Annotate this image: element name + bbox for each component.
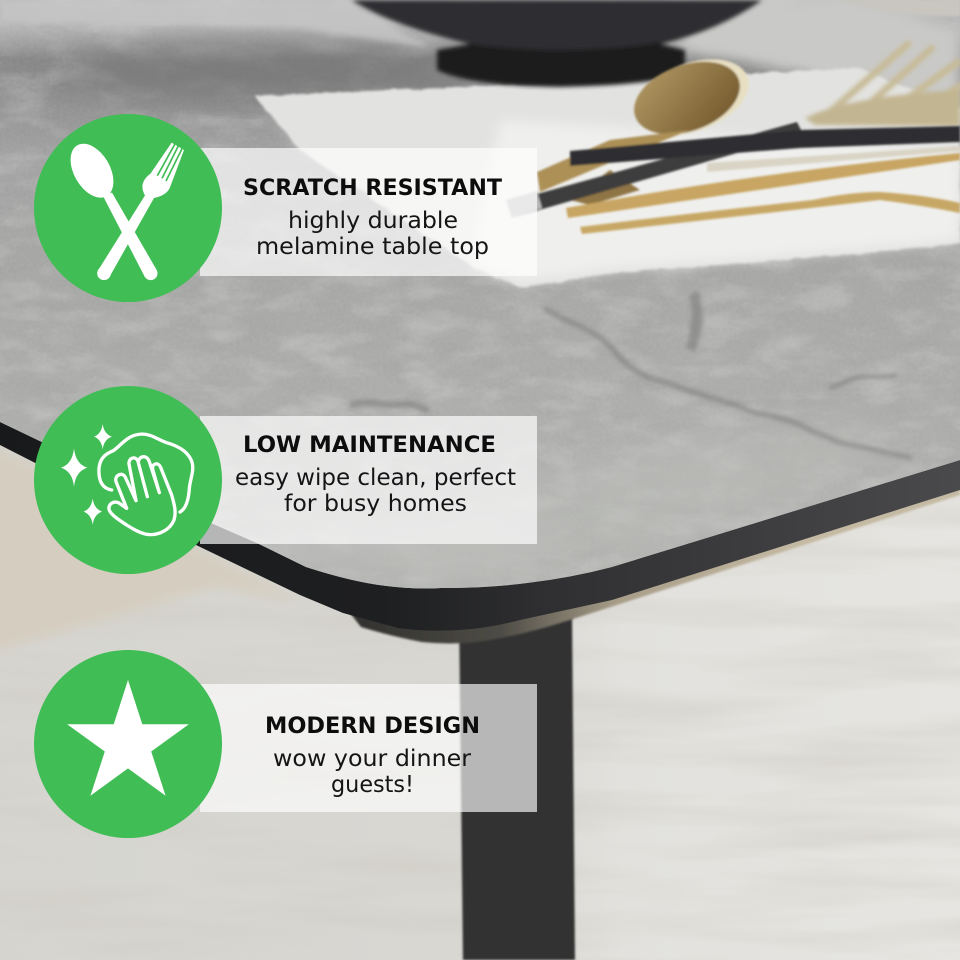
black handles bbox=[508, 122, 803, 217]
heading: SCRATCH RESISTANT bbox=[243, 176, 502, 201]
gold cutlery bbox=[805, 44, 960, 126]
back fork bbox=[830, 44, 960, 114]
description: for busy homes bbox=[284, 491, 467, 517]
description: guests! bbox=[331, 772, 414, 798]
bowl bbox=[352, 0, 762, 87]
plate bbox=[835, 0, 960, 16]
spoon bbox=[625, 45, 759, 149]
fork bbox=[97, 143, 184, 280]
marble table top bbox=[0, 0, 960, 608]
icon: spoon and fork bbox=[34, 114, 222, 302]
sparkles bbox=[61, 424, 112, 525]
description: melamine table top bbox=[256, 234, 489, 260]
table underside bbox=[340, 488, 960, 644]
wall bbox=[0, 440, 300, 655]
dark blurred band behind napkin bbox=[60, 46, 480, 98]
description: easy wipe clean, perfect bbox=[235, 465, 516, 491]
description: highly durable bbox=[288, 208, 458, 234]
cloth bbox=[99, 434, 193, 512]
marble veins bbox=[350, 293, 913, 460]
icon: hand wiping with sparkles bbox=[34, 386, 222, 574]
panel: modern design bbox=[200, 684, 537, 812]
spoon bbox=[62, 136, 157, 280]
gold handles bbox=[566, 153, 960, 218]
heading: MODERN DESIGN bbox=[265, 714, 480, 739]
table rim bbox=[0, 422, 960, 631]
table leg bbox=[459, 610, 575, 960]
hand bbox=[109, 457, 175, 535]
panel: scratch resistant bbox=[200, 148, 537, 276]
napkin bbox=[255, 68, 960, 288]
icon: star bbox=[34, 650, 222, 838]
panel: low maintenance bbox=[200, 416, 537, 544]
heading: LOW MAINTENANCE bbox=[243, 433, 496, 458]
description: wow your dinner bbox=[273, 746, 472, 772]
blurred light strip near bowl bbox=[0, 0, 432, 48]
